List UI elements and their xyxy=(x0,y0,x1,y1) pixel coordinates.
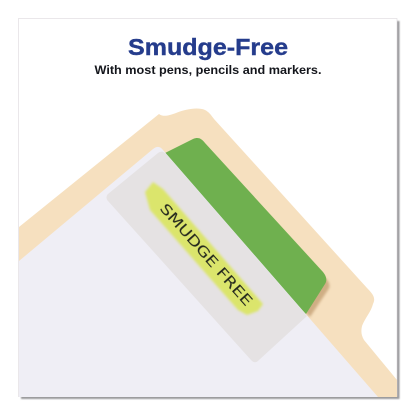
manila folder xyxy=(19,109,397,397)
white label xyxy=(106,152,307,362)
green tab shadow xyxy=(306,277,330,318)
white paper sheet xyxy=(19,147,378,397)
subtitle: With most pens, pencils and markers. xyxy=(94,63,322,77)
green tab xyxy=(165,138,326,314)
handwritten label text: SMUDGE FREE xyxy=(156,201,255,310)
title: Smudge-Free xyxy=(128,34,288,60)
yellow highlighter stroke xyxy=(145,182,263,315)
file folder illustration xyxy=(19,109,397,397)
